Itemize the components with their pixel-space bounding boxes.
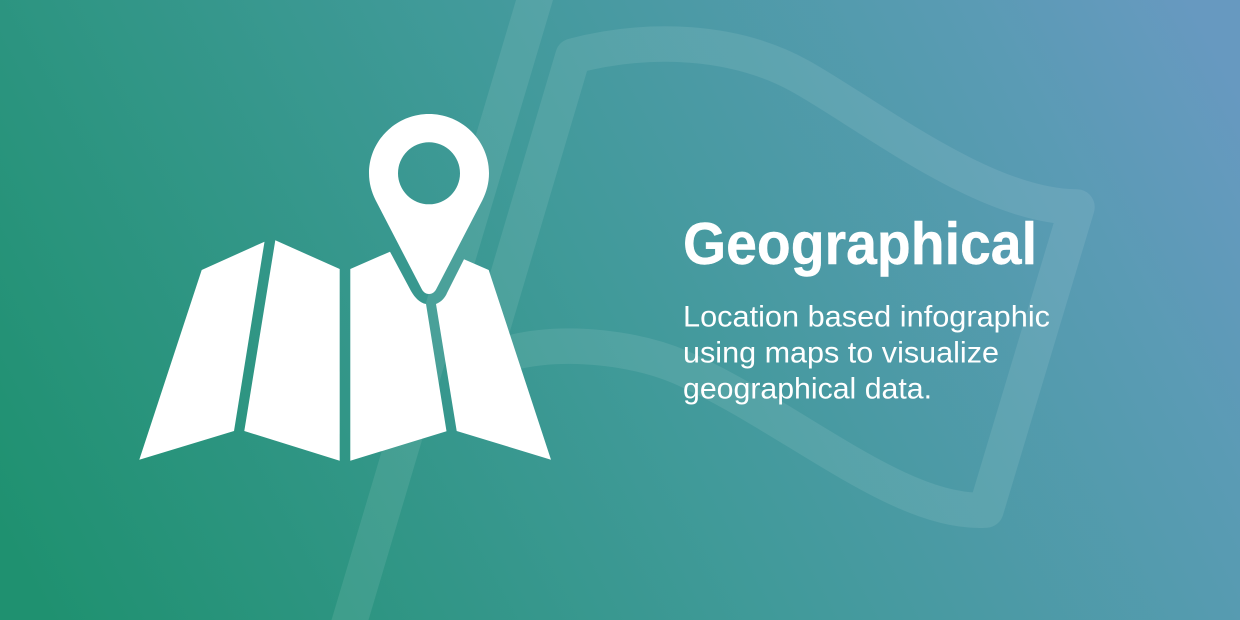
icon: folded map with location pin (139, 114, 551, 461)
map panel 3 (350, 252, 446, 461)
description text (683, 300, 1050, 406)
location pin (369, 114, 489, 294)
description text: using maps to visualize (683, 336, 999, 370)
map panel 2 (244, 240, 340, 461)
description text: Location based infographic (683, 300, 1050, 334)
map panel 1 (139, 242, 264, 460)
description text: geographical data. (683, 372, 932, 406)
watermark: flag pole (332, 0, 553, 620)
map panel 4 (436, 259, 551, 460)
watermark: flag outline (485, 44, 1077, 510)
heading: Geographical (683, 211, 1037, 277)
